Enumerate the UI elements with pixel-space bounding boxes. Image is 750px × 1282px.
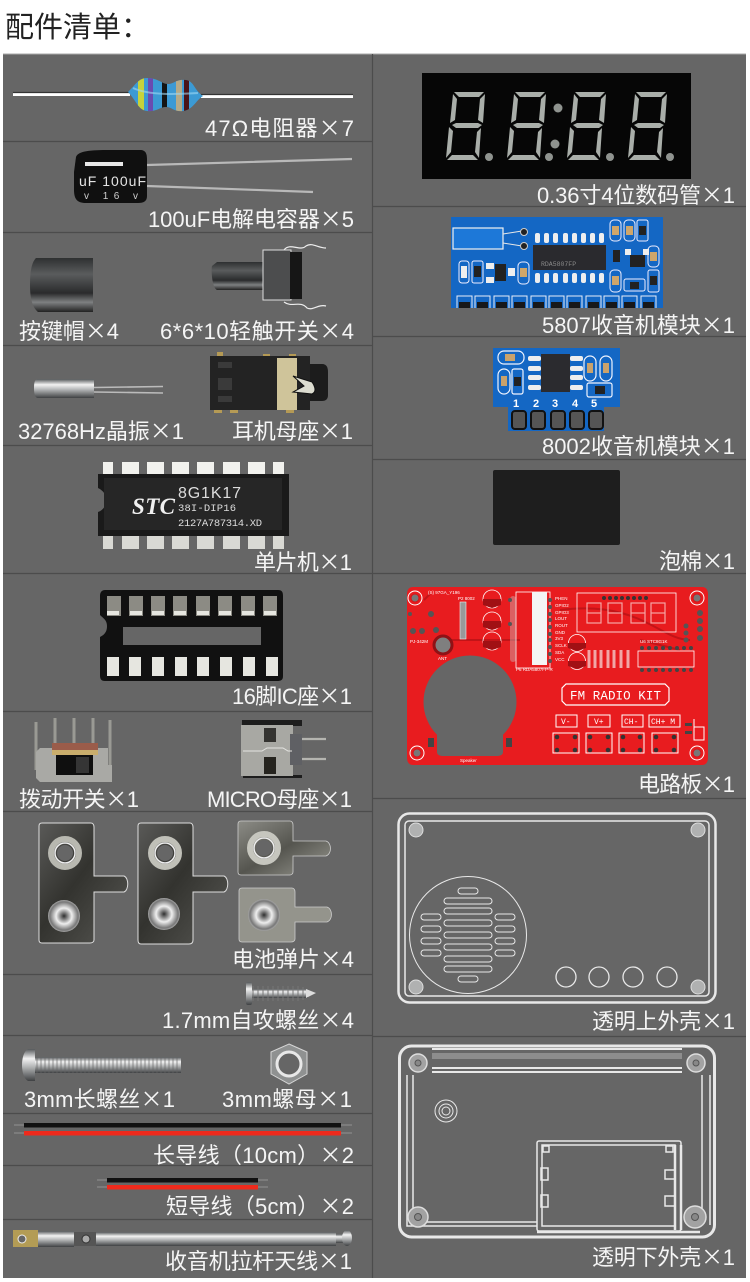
icon: 16-pin IC socket [100, 590, 283, 681]
icon: 5807 module: RDA5807FP [541, 261, 576, 268]
label: battery contacts: 电池弹片×4 [232, 942, 354, 974]
panel: long wires [14, 1123, 354, 1170]
panel: IC socket [100, 590, 352, 711]
panel: antenna [13, 1230, 352, 1276]
panel: circuit board [407, 587, 735, 799]
icon: resistor [13, 78, 353, 112]
title: 配件清单： [5, 11, 150, 44]
icon: red PCB: V+ [594, 718, 604, 727]
label: micro USB: MICRO母座×1 [207, 782, 352, 814]
panel: 4-digit display [422, 73, 735, 210]
icon: long screw [22, 1049, 181, 1081]
label: self-tapping screw: 1.7mm自攻螺丝×4 [162, 1003, 354, 1035]
icon: slide switch [36, 718, 112, 782]
icon: micro USB socket [241, 720, 326, 778]
label: foam: 泡棉×1 [659, 544, 735, 576]
icon: 8002 module: 3 [552, 398, 558, 410]
icon: red PCB: VCC [555, 657, 565, 662]
label: microcontroller: 单片机×1 [254, 545, 352, 577]
icon: red PCB: FM RADIO KIT [570, 690, 661, 704]
panel: long screw and nut [22, 1044, 352, 1114]
label: keycap: 按键帽×4 [19, 314, 119, 346]
icon: red PCB: ANT [438, 656, 447, 661]
label: long screw: 3mm长螺丝×1 [24, 1082, 175, 1114]
label: 5807 module: 5807收音机模块×1 [542, 308, 735, 340]
icon: DIP16 chip: 2127A787314.XD [178, 518, 262, 530]
panel: capacitor [74, 150, 354, 234]
icon: red PCB: PJ-342M [410, 639, 428, 644]
icon: top shell [398, 814, 716, 1002]
label: slide switch: 拨动开关×1 [19, 782, 139, 814]
icon: red PCB: LOUT [555, 616, 567, 621]
icon: DIP16 chip: STC [132, 494, 176, 519]
icon: DIP16 chip: 8G1K17 [178, 485, 241, 502]
icon: red PCB: U6 STC8G1K [640, 639, 668, 644]
icon: DIP16 chip [98, 462, 289, 549]
icon: 8002 module: 4 [572, 398, 579, 410]
icon: red PCB: V- [561, 718, 571, 727]
panel: transparent bottom shell [400, 1046, 735, 1272]
icon: red PCB: P2 8002 [458, 596, 475, 601]
label: long wires: 长导线（10cm）×2 [153, 1138, 354, 1170]
icon: red PCB: SCLK [555, 643, 567, 648]
icon: red PCB: ROUT [555, 623, 568, 628]
icon: red PCB: CH+ M [651, 718, 675, 727]
panel: slide switch and micro USB [19, 718, 352, 814]
icon: battery contact long 2 [138, 823, 228, 944]
icon: DIP16 chip: 38I-DIP16 [178, 503, 236, 515]
icon: battery contact long 1 [39, 823, 128, 943]
icon: red PCB [407, 587, 708, 765]
icon: red PCB: (S) 97GA_Y196 [428, 590, 460, 595]
label: antenna: 收音机拉杆天线×1 [165, 1244, 352, 1276]
icon: hex nut [271, 1044, 307, 1084]
icon: electrolytic capacitor: uF 100uF [79, 173, 146, 189]
label: headphone socket: 耳机母座×1 [232, 414, 353, 446]
icon: bottom shell [400, 1046, 714, 1237]
icon: red PCB: Speaker [460, 758, 477, 763]
icon: 8002 module [493, 348, 620, 431]
icon: foam pad [493, 470, 620, 545]
label: IC socket: 16脚IC座×1 [232, 679, 352, 711]
panel: battery contacts [39, 821, 354, 974]
label: resistor: 47Ω电阻器×7 [205, 111, 354, 143]
icon: 7-segment display [422, 73, 691, 179]
label: display: 0.36寸4位数码管×1 [537, 178, 735, 210]
icon: headphone socket [210, 352, 328, 413]
icon: red PCB: GND [555, 630, 566, 635]
icon: red PCB: CH- [624, 718, 638, 727]
icon: tactile switch [212, 245, 326, 309]
icon: long wires [14, 1123, 352, 1136]
icon: red PCB: GPIO2 [555, 603, 569, 608]
icon: crystal [34, 379, 163, 398]
icon: telescopic antenna [13, 1230, 352, 1247]
label: capacitor: 100uF电解电容器×5 [148, 202, 354, 234]
icon: self-tapping screw [246, 982, 316, 1005]
icon: 8002 module: 2 [533, 398, 539, 410]
label: nut: 3mm螺母×1 [222, 1082, 352, 1114]
label: top shell: 透明上外壳×1 [592, 1004, 735, 1036]
label: tactile switch: 6*6*10轻触开关×4 [160, 314, 354, 346]
icon: 5807 module [451, 217, 663, 308]
panel: transparent top shell [398, 814, 735, 1036]
icon: electrolytic capacitor: v 16 v [84, 191, 138, 202]
icon: 8002 module: 1 [513, 398, 519, 410]
icon: red PCB: SDA [555, 650, 564, 655]
icon: red PCB: GPIO3 [555, 610, 569, 615]
label: bottom shell: 透明下外壳×1 [592, 1240, 735, 1272]
panel: crystal and headphone socket [18, 352, 353, 446]
panel: 8002 module [493, 348, 735, 461]
panel: microcontroller [98, 462, 352, 577]
icon: red PCB: 3V3 [555, 636, 564, 641]
icon: battery contact short spring [238, 821, 330, 875]
panel: 5807 radio module [451, 217, 735, 340]
label: 8002 module: 8002收音机模块×1 [542, 429, 735, 461]
label: circuit board: 电路板×1 [638, 767, 735, 799]
panel: short wires [97, 1178, 354, 1221]
icon: 8002 module: 5 [591, 398, 597, 410]
icon: electrolytic capacitor [74, 150, 352, 203]
icon: short wires [97, 1178, 268, 1190]
label: crystal: 32768Hz晶振×1 [18, 414, 184, 446]
icon: red PCB: P6 RDA5807FP-R [516, 667, 554, 672]
icon: red PCB: PHEN [555, 596, 568, 601]
panel: foam [493, 470, 735, 576]
panel: self-tapping screw [162, 982, 354, 1035]
label: short wires: 短导线（5cm）×2 [166, 1189, 354, 1221]
icon: keycap [30, 258, 93, 312]
panel: keycap and tactile switch [19, 245, 354, 346]
panel: resistor [13, 78, 353, 138]
icon: battery contact short dome [239, 888, 332, 942]
